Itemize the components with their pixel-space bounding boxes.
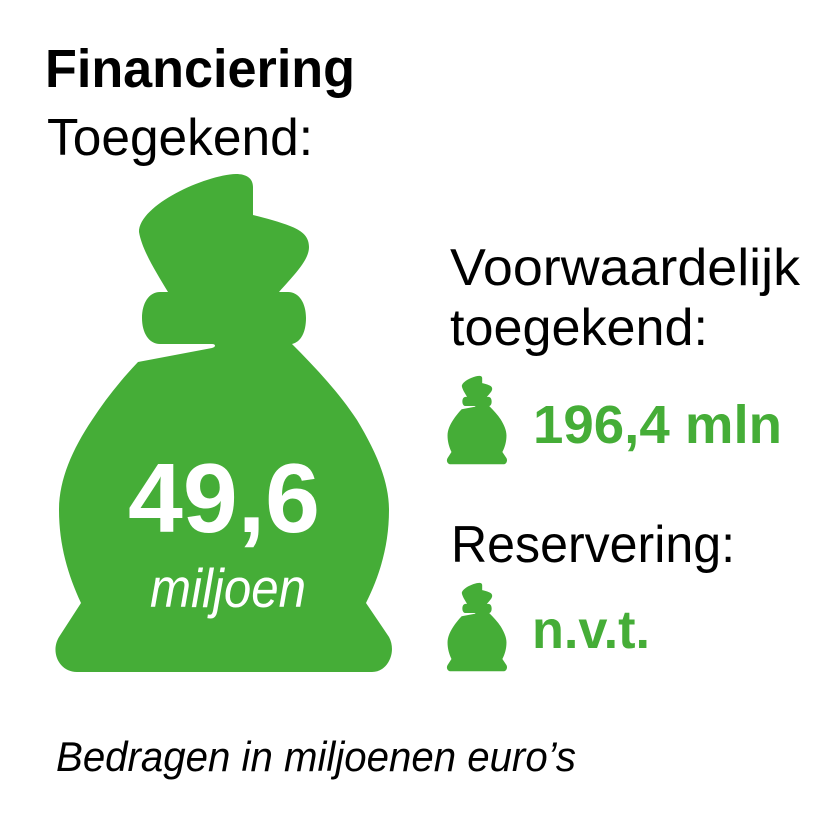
heading: voorwaardelijk toegekend: toegekend: (450, 299, 708, 357)
title: Financiering (45, 39, 355, 99)
heading: toegekend: Toegekend: (47, 109, 313, 167)
value: 196,4 mln: 196,4 mln (533, 395, 782, 455)
footnote: Bedragen in miljoenen euro’s (56, 733, 576, 780)
icon: large money bag (55, 174, 392, 672)
icon: small money bag reservering (447, 583, 507, 671)
icon: small money bag voorwaardelijk (447, 376, 507, 464)
label: miljoen: miljoen (150, 557, 306, 619)
value: n.v.t.: n.v.t. (532, 600, 650, 660)
heading: voorwaardelijk toegekend (450, 239, 801, 357)
heading: reservering: Reservering: (451, 516, 735, 574)
heading: voorwaardelijk toegekend: Voorwaardelijk (450, 239, 801, 297)
value: 49,6: 49,6 (128, 443, 320, 553)
